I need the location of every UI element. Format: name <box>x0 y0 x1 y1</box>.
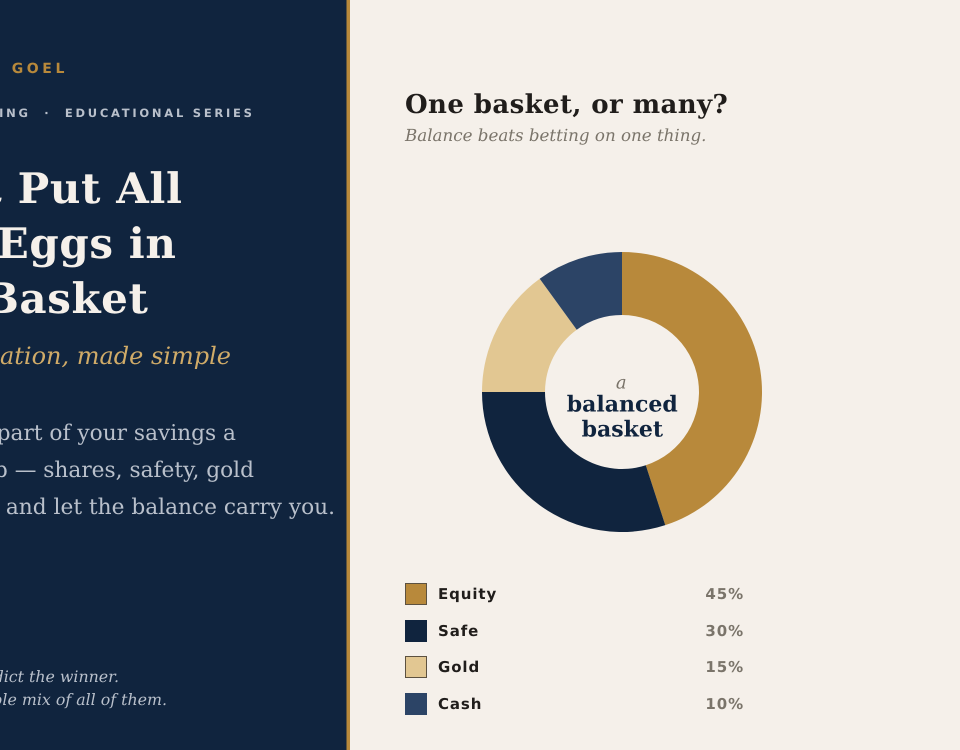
legend row: safe <box>406 620 744 642</box>
segment: cash 10% <box>540 252 622 330</box>
body text <box>0 421 335 520</box>
donut chart <box>482 252 762 532</box>
legend row: equity: 45% <box>705 585 744 603</box>
chart heading: One basket, or many? <box>405 90 728 120</box>
donut centre label: basket <box>582 416 664 442</box>
legend row: gold: 15% <box>705 658 744 676</box>
donut centre label <box>567 372 678 442</box>
panel: left navy <box>0 0 350 750</box>
donut centre label: a <box>616 372 627 393</box>
segment: gold 15% <box>482 279 577 392</box>
legend row: safe: 30% <box>705 622 744 640</box>
legend row: equity: Equity <box>438 585 497 603</box>
donut centre label: balanced <box>567 391 678 417</box>
legend row: safe: Safe <box>438 622 479 640</box>
legend row: gold <box>406 656 744 678</box>
title <box>0 164 182 323</box>
segment: safe 30% <box>482 392 665 532</box>
legend row: cash <box>406 694 744 714</box>
legend <box>406 584 744 714</box>
legend row: cash: 10% <box>705 695 744 713</box>
legend row: gold: Gold <box>438 658 480 676</box>
legend row: cash: Cash <box>438 695 482 713</box>
legend row: equity <box>406 584 744 604</box>
segment: equity 45% <box>622 252 762 525</box>
footnote <box>0 667 167 709</box>
chart subheading: Balance beats betting on one thing. <box>404 125 706 145</box>
